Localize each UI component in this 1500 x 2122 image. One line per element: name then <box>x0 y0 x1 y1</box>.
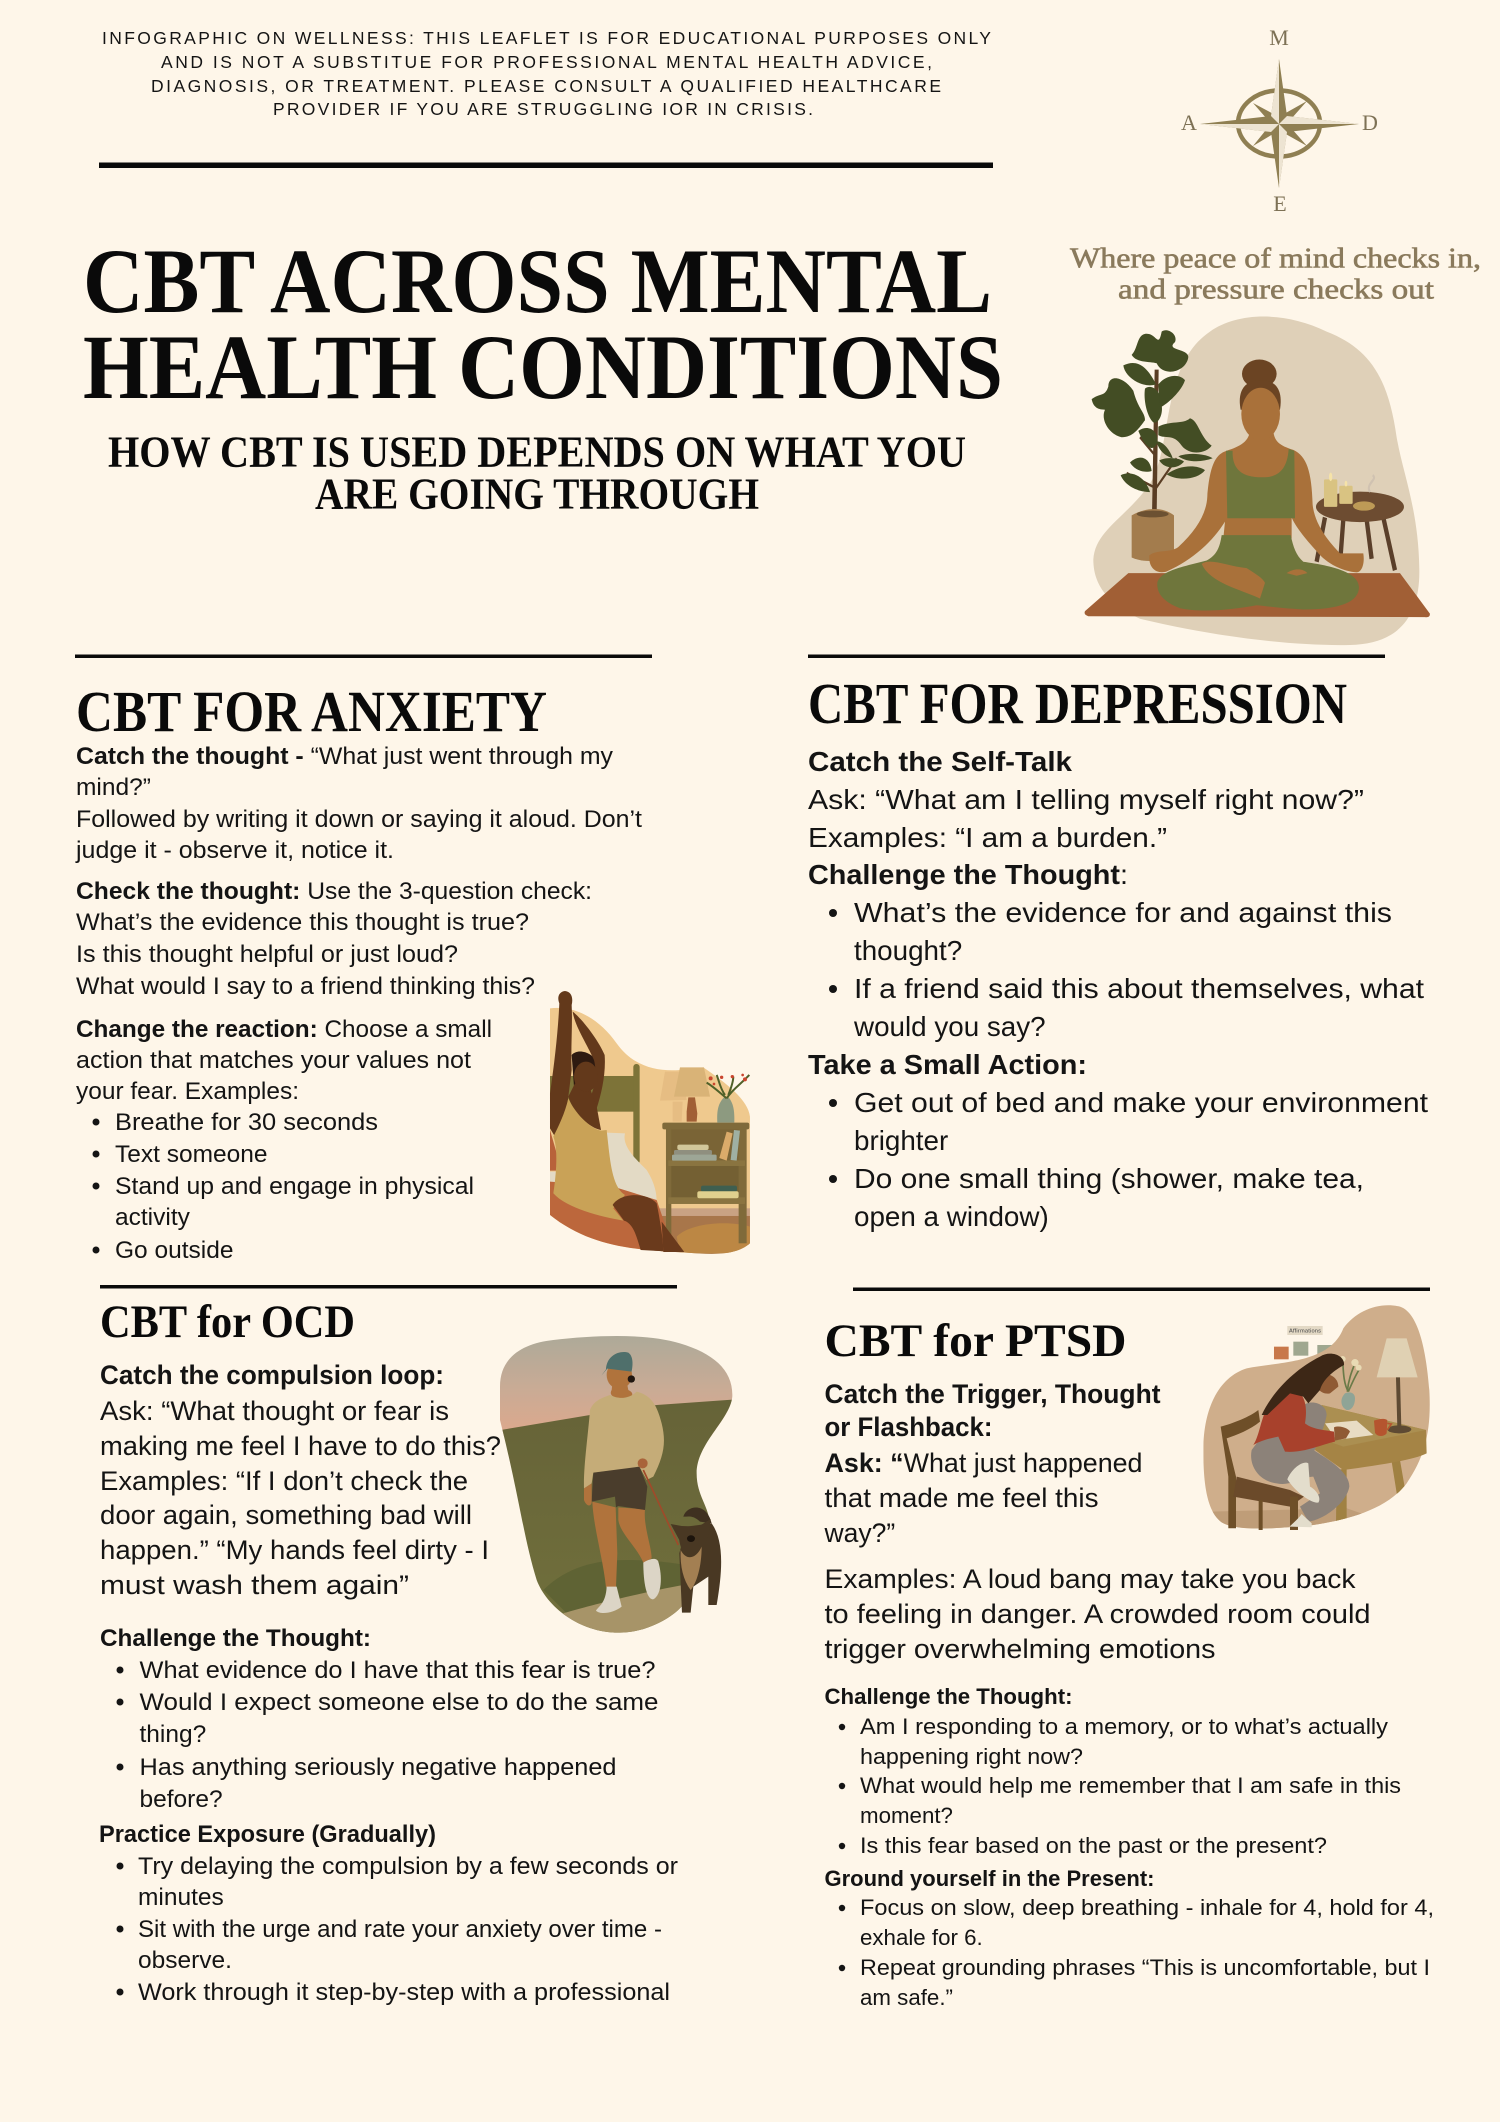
icon: compass logo: D <box>1362 110 1378 135</box>
disclaimer text: AND IS NOT A SUBSTITUE FOR PROFESSIONAL MENTAL HEALTH ADVICE, <box>161 52 932 72</box>
tagline: Where peace of mind checks in, <box>1070 242 1481 274</box>
text: depression steps: If a friend said this about themselves, what <box>854 973 1424 1004</box>
text: anxiety steps: What would I say to a friend thinking this? <box>76 973 535 1000</box>
text: anxiety steps: Followed by writing it down or saying it aloud. Don’t <box>76 806 642 833</box>
disclaimer text: INFOGRAPHIC ON WELLNESS: THIS LEAFLET IS FOR EDUCATIONAL PURPOSES ONLY <box>102 28 991 48</box>
woman <box>550 991 684 1252</box>
disclaimer text: DIAGNOSIS, OR TREATMENT. PLEASE CONSULT A QUALIFIED HEALTHCARE <box>151 76 941 96</box>
panel: CBT for PTSD: Am I responding to a memory, or to what’s actually <box>860 1714 1389 1739</box>
heading: anxiety: CBT FOR ANXIETY <box>76 679 547 744</box>
text: PTSD steps: or Flashback: <box>824 1412 992 1442</box>
plant <box>1092 330 1213 561</box>
main title: CBT ACROSS MENTAL <box>83 230 992 332</box>
text: depression steps: Examples: “I am a burden.” <box>808 822 1167 853</box>
panel: CBT for OCD: Practice Exposure (Gradually) <box>99 1821 436 1848</box>
affirmation notes: Affirmations <box>1289 1329 1321 1335</box>
text: anxiety steps: Breathe for 30 seconds <box>115 1109 378 1136</box>
subtitle: HOW CBT IS USED DEPENDS ON WHAT YOU <box>108 428 966 476</box>
icon: compass logo <box>1181 25 1378 216</box>
affirmation notes <box>1274 1326 1332 1359</box>
text: OCD steps: must wash them again” <box>100 1570 409 1600</box>
text: anxiety steps: Change the reaction: Choose a small <box>76 1016 492 1043</box>
panel: CBT for OCD: Challenge the Thought: <box>100 1625 371 1652</box>
text: anxiety steps: Stand up and engage in physical <box>115 1173 474 1200</box>
text: depression steps <box>808 746 1428 1232</box>
panel: CBT for OCD: Would I expect someone else to do the same <box>140 1689 658 1716</box>
text: anxiety steps: your fear. Examples: <box>76 1078 299 1105</box>
text: anxiety steps <box>75 743 642 1264</box>
chair <box>1221 1410 1304 1530</box>
nightstand <box>662 1067 749 1243</box>
panel: CBT for PTSD: moment? <box>860 1803 953 1828</box>
panel: CBT for PTSD: Focus on slow, deep breathing - inhale for 4, hold for 4, <box>860 1895 1434 1920</box>
panel: CBT for PTSD: happening right now? <box>860 1744 1083 1769</box>
illustration: woman stretching on bed <box>550 991 753 1257</box>
illustration: woman meditating <box>1085 317 1430 645</box>
panel: CBT for OCD: minutes <box>138 1884 224 1911</box>
panel: CBT for OCD: What evidence do I have that this fear is true? <box>140 1657 656 1684</box>
illustration: woman journaling at desk <box>1200 1300 1433 1533</box>
clothes <box>1226 449 1295 518</box>
text: depression steps: Do one small thing (shower, make tea, <box>854 1163 1364 1194</box>
panel: CBT for OCD: observe. <box>138 1947 232 1974</box>
text: PTSD steps: Catch the Trigger, Thought <box>824 1379 1161 1409</box>
text: OCD steps: door again, something bad will <box>100 1500 472 1530</box>
panel: CBT for PTSD: Repeat grounding phrases “This is uncomfortable, but I <box>860 1955 1430 1980</box>
panel: CBT for PTSD: am safe.” <box>860 1985 953 2010</box>
panel: CBT for PTSD: What would help me remember that I am safe in this <box>860 1773 1401 1798</box>
rule: PTSD <box>853 1288 1430 1291</box>
mat <box>1085 573 1430 617</box>
text: anxiety steps: action that matches your values not <box>76 1047 471 1074</box>
text: PTSD steps: trigger overwhelming emotions <box>824 1634 1216 1664</box>
text: anxiety steps: Check the thought: Use the 3-question check: <box>76 878 592 905</box>
text: PTSD steps: way?” <box>824 1518 895 1548</box>
panel: CBT for PTSD: Ground yourself in the Present: <box>824 1866 1154 1891</box>
text: depression steps: would you say? <box>853 1011 1046 1042</box>
subtitle: ARE GOING THROUGH <box>315 470 759 518</box>
text: PTSD steps: Ask: “What just happened <box>824 1448 1142 1478</box>
text: OCD steps: Ask: “What thought or fear is <box>100 1396 449 1426</box>
text: anxiety steps: Text someone <box>115 1141 268 1168</box>
rule: OCD <box>100 1285 677 1288</box>
text: PTSD steps: to feeling in danger. A crowded room could <box>824 1599 1370 1629</box>
woman <box>1251 1354 1350 1527</box>
desk items <box>1315 1338 1427 1470</box>
text: anxiety steps: Catch the thought - “What just went through my <box>76 743 614 770</box>
text: PTSD steps <box>824 1379 1370 1664</box>
disclaimer text <box>102 28 991 119</box>
icon: compass logo: E <box>1273 191 1287 216</box>
panel: CBT for OCD: before? <box>140 1786 223 1813</box>
disclaimer text: PROVIDER IF YOU ARE STRUGGLING IOR IN CRISIS. <box>273 99 813 119</box>
panel: CBT for OCD: thing? <box>140 1721 206 1748</box>
text: anxiety steps: What’s the evidence this thought is true? <box>76 909 529 936</box>
panel: CBT for OCD <box>99 1296 678 2006</box>
text: OCD steps: Catch the compulsion loop: <box>100 1360 444 1390</box>
subtitle <box>108 428 966 518</box>
dog <box>671 1507 721 1613</box>
rule: depression <box>808 654 1385 658</box>
text: depression steps: Challenge the Thought : <box>808 859 1128 890</box>
panel: CBT for PTSD <box>824 1315 1434 2010</box>
main title: HEALTH CONDITIONS <box>83 316 1003 418</box>
text: depression steps: What’s the evidence for and against this <box>854 897 1392 928</box>
rule: anxiety <box>75 654 652 658</box>
text: PTSD steps: that made me feel this <box>824 1483 1098 1513</box>
text: OCD steps: Examples: “If I don’t check the <box>100 1466 468 1496</box>
heading: PTSD: CBT for PTSD <box>824 1315 1126 1367</box>
side table and candles <box>1316 473 1404 570</box>
text: depression steps: Take a Small Action: <box>808 1049 1087 1080</box>
text: anxiety steps: activity <box>115 1204 191 1231</box>
panel: CBT for OCD: Work through it step-by-step with a professional <box>138 1979 670 2006</box>
icon: compass logo: A <box>1181 110 1197 135</box>
text: depression steps: brighter <box>854 1125 948 1156</box>
hair <box>1240 359 1281 410</box>
icon: compass logo: M <box>1269 25 1289 50</box>
body <box>1149 429 1364 572</box>
text: depression steps: open a window) <box>854 1201 1049 1232</box>
text: depression steps: Catch the Self-Talk <box>808 746 1073 777</box>
panel: CBT for PTSD: exhale for 6. <box>860 1925 983 1950</box>
text: anxiety steps: Is this thought helpful or just loud? <box>76 941 458 968</box>
panel: CBT for OCD: Try delaying the compulsion by a few seconds or <box>138 1853 678 1880</box>
panel: CBT for anxiety <box>75 679 642 1264</box>
text: anxiety steps: judge it - observe it, notice it. <box>75 837 394 864</box>
text: depression steps: Get out of bed and make your environment <box>854 1087 1428 1118</box>
main title <box>83 230 1003 418</box>
illustration: woman walking dog <box>493 1330 740 1637</box>
walker <box>584 1352 678 1613</box>
panel: CBT for depression <box>808 671 1428 1232</box>
panel: CBT for PTSD: Is this fear based on the past or the present? <box>860 1833 1327 1858</box>
panel: CBT for PTSD: Challenge the Thought: <box>824 1684 1072 1709</box>
text: PTSD steps: Examples: A loud bang may take you back <box>824 1564 1356 1594</box>
tagline: and pressure checks out <box>1118 274 1434 306</box>
text: depression steps: Ask: “What am I telling myself right now?” <box>808 784 1364 815</box>
text: OCD steps <box>100 1360 501 1600</box>
text: OCD steps: making me feel I have to do this? <box>100 1431 501 1461</box>
tagline <box>1070 242 1481 306</box>
text: anxiety steps: mind?” <box>76 774 151 801</box>
text: anxiety steps: Go outside <box>115 1237 234 1264</box>
text: depression steps: thought? <box>854 935 962 966</box>
heading: depression: CBT FOR DEPRESSION <box>808 671 1347 736</box>
panel: CBT for OCD: Sit with the urge and rate your anxiety over time - <box>138 1916 662 1943</box>
panel: CBT for OCD: Has anything seriously negative happened <box>140 1754 616 1781</box>
text: OCD steps: happen.” “My hands feel dirty - I <box>100 1535 489 1565</box>
heading: OCD: CBT for OCD <box>100 1296 355 1348</box>
